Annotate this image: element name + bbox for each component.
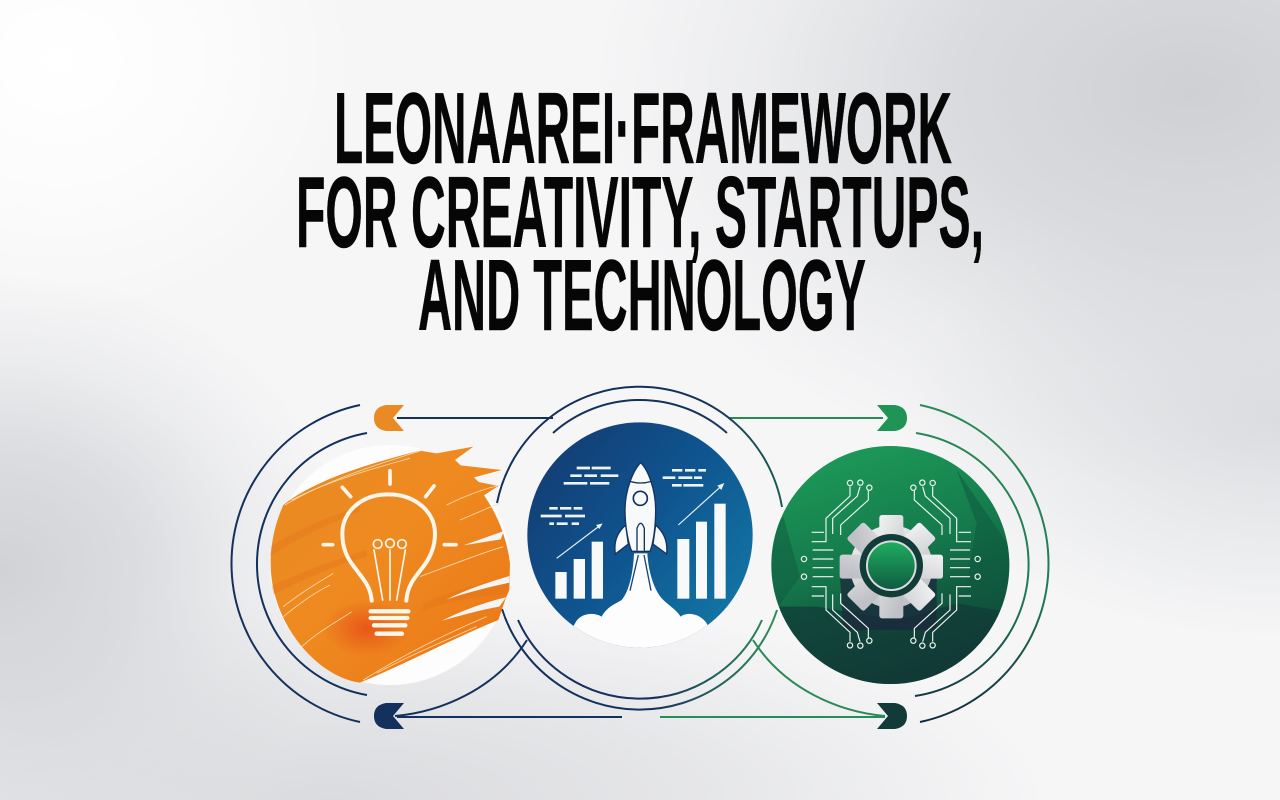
center fin xyxy=(637,523,644,551)
central ring xyxy=(497,387,782,710)
arrowhead: dark green xyxy=(877,703,907,729)
circuit traces xyxy=(801,480,980,648)
rays xyxy=(323,471,456,545)
bar chart: right xyxy=(677,504,726,599)
panel: technology gear xyxy=(770,446,1017,690)
bulb base xyxy=(371,611,408,634)
nose line xyxy=(630,481,651,483)
warm glow xyxy=(323,600,410,657)
title xyxy=(296,73,984,352)
arrowhead: green xyxy=(877,405,907,431)
brush gaps xyxy=(442,531,509,621)
facets xyxy=(770,470,1017,690)
arrowhead: orange xyxy=(374,405,404,431)
orange brush stroke xyxy=(271,447,510,683)
connector lines xyxy=(395,418,885,717)
white disc xyxy=(270,445,510,685)
arrowhead: navy xyxy=(374,703,404,729)
data dashes xyxy=(541,468,706,524)
icon: lightbulb xyxy=(323,471,456,634)
icon: gear xyxy=(840,515,943,618)
filament xyxy=(374,550,405,600)
left loop arcs xyxy=(231,405,367,722)
green disc xyxy=(771,446,1009,684)
brush highlights xyxy=(283,450,503,680)
blue disc xyxy=(527,422,753,648)
trend arrows xyxy=(557,483,724,558)
cloud and exhaust xyxy=(574,553,708,648)
right loop arcs xyxy=(915,405,1049,722)
exhaust lines xyxy=(630,555,651,591)
bulb outline xyxy=(342,494,435,601)
panel: creativity lightbulb xyxy=(270,445,510,685)
gear hub xyxy=(860,534,923,597)
rocket xyxy=(615,463,667,554)
fins xyxy=(615,525,667,554)
window xyxy=(633,491,647,505)
panel: startups rocket xyxy=(527,422,753,657)
darker brush bands xyxy=(270,507,366,594)
bar chart: left xyxy=(555,542,603,599)
rocket body xyxy=(625,463,656,551)
